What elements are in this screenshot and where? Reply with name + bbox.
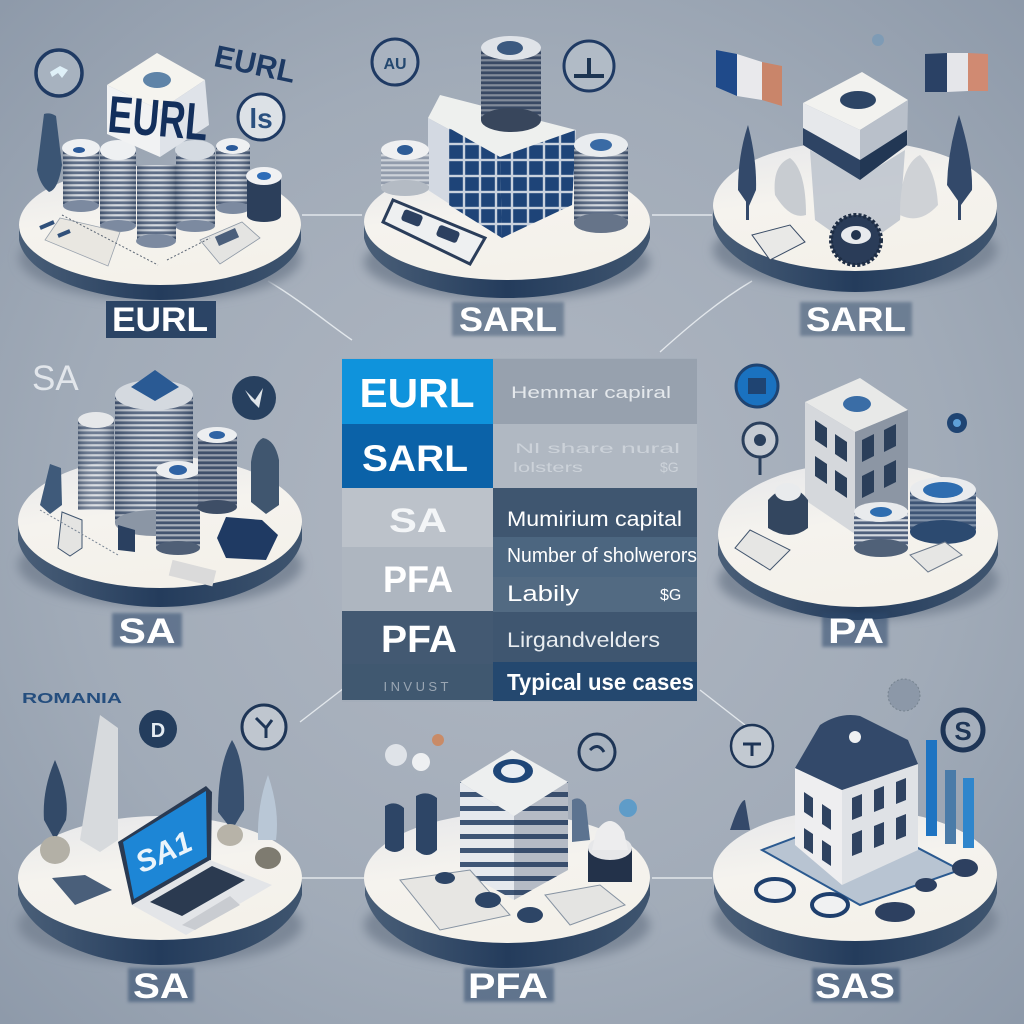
icon: cypress trees <box>738 115 972 220</box>
floating SA text: SA <box>32 359 79 398</box>
label: SA <box>112 612 182 651</box>
icon: round badge right: ls <box>249 103 273 134</box>
icon: bulb cluster <box>385 734 444 771</box>
label: PFA: PFA <box>468 967 548 1006</box>
bars <box>926 740 974 848</box>
coin stack left <box>78 412 114 510</box>
coin stack on roof <box>481 36 541 132</box>
label: EURL: EURL <box>112 301 208 339</box>
icon: gem <box>217 517 278 560</box>
platform: PFA <box>364 750 650 968</box>
platform: SARL cube <box>713 72 997 292</box>
platform: SAS <box>713 715 997 965</box>
platform: EURL <box>19 53 301 301</box>
table rows left <box>342 359 493 700</box>
floating ROMANIA text: ROMANIA <box>22 690 122 707</box>
table rows left: EURL <box>360 370 474 416</box>
building <box>428 95 576 238</box>
table rows right: Hemmar capiral <box>511 383 671 402</box>
tall coin stack <box>115 370 193 536</box>
icon: badge K <box>232 376 276 420</box>
coin stack left <box>381 140 429 196</box>
icon: badge D <box>139 710 177 748</box>
coin stack small <box>854 502 908 557</box>
label: SARL: SARL <box>459 301 557 339</box>
coin stack center <box>156 461 200 555</box>
connector lines <box>268 215 752 878</box>
platform: SA <box>18 370 302 607</box>
table rows right: Lirgandvelders <box>507 629 660 652</box>
cypress <box>44 760 67 840</box>
obelisks <box>251 438 279 514</box>
floating label EURL: EURL <box>211 38 299 90</box>
labels <box>106 301 912 1006</box>
icon: laptop <box>118 786 272 935</box>
table rows right: $G <box>660 459 679 475</box>
icon: badge blue <box>736 365 778 407</box>
icon: badge S: S <box>954 716 972 746</box>
icon: EURL cube: EURL <box>106 86 210 152</box>
table rows right: Number of sholwerors <box>507 545 697 567</box>
icon: badge S <box>943 710 983 750</box>
label: SAS: SAS <box>815 967 895 1006</box>
table rows right: Nl share nural <box>515 440 680 456</box>
icon: badge AU <box>372 39 418 85</box>
small items <box>58 512 82 556</box>
platform: SA laptop <box>18 715 302 965</box>
table rows left: PFA <box>383 559 453 600</box>
table rows right: Mumirium capital <box>507 508 682 531</box>
cards <box>400 870 510 930</box>
table rows left: SA <box>389 502 447 540</box>
icon: obelisk <box>37 113 62 192</box>
building <box>795 715 918 885</box>
building <box>805 378 908 534</box>
icon: round badge right <box>238 94 284 140</box>
icon: pin badge <box>743 423 777 475</box>
stones <box>775 158 806 216</box>
table rows left: PFA <box>381 619 457 661</box>
table rows left: SARL <box>362 438 468 479</box>
icon: round badge left <box>36 50 82 96</box>
table rows right: Labily <box>507 581 579 606</box>
table rows left: INVUST <box>384 679 449 694</box>
panel: central table <box>342 358 697 702</box>
hatched pedestal <box>810 150 905 250</box>
label: SA bottom: SA <box>133 967 189 1006</box>
icon: badge Y <box>242 705 286 749</box>
document cards <box>45 218 120 266</box>
card <box>383 200 485 264</box>
card <box>752 225 805 260</box>
icon: laptop: SA1 <box>131 825 197 880</box>
icon: badge T <box>731 725 773 767</box>
icon: small dot <box>872 34 884 46</box>
label: SARL right: SARL <box>806 301 906 339</box>
icon: French flag left <box>716 50 782 106</box>
icon: badge D: D <box>151 720 165 742</box>
icon: badge ring <box>579 734 615 770</box>
icon: French flag right <box>925 53 988 92</box>
coin stacks <box>62 138 282 248</box>
table rows right: lolsters <box>513 459 583 475</box>
icon: hatched disc <box>888 679 920 711</box>
icon: cube <box>803 72 908 180</box>
pot <box>588 821 632 882</box>
table rows right <box>493 359 697 701</box>
obelisk <box>80 715 118 852</box>
coin stack large <box>910 477 976 544</box>
label: SA: SA <box>118 612 176 651</box>
icon: badge T <box>564 41 614 91</box>
table rows right: $G <box>660 587 681 604</box>
table rows right: Typical use cases <box>507 669 694 695</box>
small coins <box>756 879 794 901</box>
building <box>460 750 568 900</box>
icon: dot badge <box>947 413 967 433</box>
icon: gear <box>831 215 881 265</box>
platform: PA <box>718 378 998 620</box>
platform: SARL building <box>364 36 650 300</box>
coin stack right <box>197 427 237 514</box>
label: PA: PA <box>828 612 884 651</box>
bollards <box>385 803 404 852</box>
small machine <box>768 488 808 535</box>
label: PA <box>822 612 888 651</box>
icon: badge AU: AU <box>383 56 407 73</box>
icon: EURL cube <box>106 53 210 157</box>
floor plate <box>762 815 960 905</box>
coin stack <box>574 133 628 233</box>
